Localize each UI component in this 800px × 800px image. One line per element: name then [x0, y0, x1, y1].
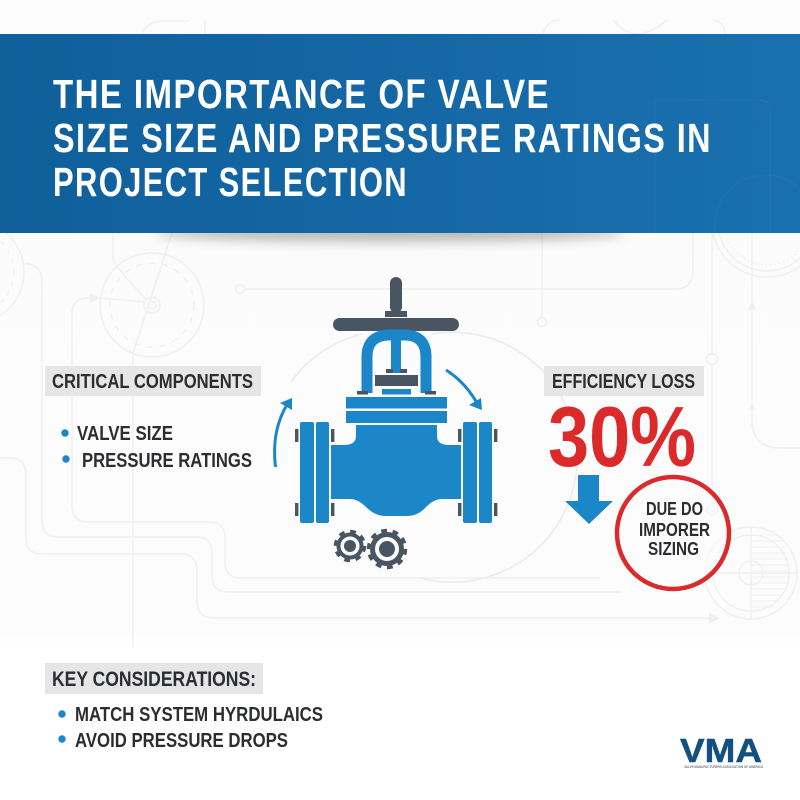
logo: VMA: VALVE MANUFACTURERS ASSOCIATION OF AMERICA [684, 765, 763, 769]
valve right flange [463, 422, 492, 523]
arrow: left rotation [275, 398, 292, 467]
heading: efficiency loss [544, 366, 704, 396]
panel: key considerations [45, 663, 323, 752]
bullet list: considerations: AVOID PRESSURE DROPS [75, 729, 288, 752]
heading: critical components [45, 366, 261, 396]
callout: due do imporer sizing: IMPORER [639, 520, 710, 540]
bullet list: components [61, 423, 252, 472]
logo: VMA: VMA [680, 732, 762, 769]
heading: key considerations [45, 663, 263, 694]
callout: due do imporer sizing: SIZING [648, 539, 699, 559]
valve left flange [300, 422, 329, 523]
background pipe schematic [0, 20, 800, 647]
stat: 30%: 30% [548, 390, 696, 485]
icon: gears [336, 530, 406, 568]
bullet list: considerations: MATCH SYSTEM HYRDULAICS [75, 703, 323, 726]
valve yoke [357, 332, 436, 394]
valve bolts [295, 429, 497, 516]
bullet list: components: PRESSURE RATINGS [82, 450, 252, 472]
header shadow [155, 222, 625, 242]
valve backdrop circle [291, 332, 577, 582]
bullet list: components: VALVE SIZE [77, 423, 173, 445]
arrow: right rotation [446, 370, 482, 410]
title: THE IMPORTANCE OF VALVE [53, 71, 550, 117]
heading: critical components: CRITICAL COMPONENTS [52, 371, 253, 393]
valve bonnet flanges [346, 397, 447, 423]
valve body [331, 425, 461, 516]
panel: efficiency loss [544, 366, 729, 589]
title [53, 71, 712, 205]
callout: due do imporer sizing: DUE DO [646, 499, 703, 519]
header band [0, 34, 800, 275]
panel: critical components [45, 366, 261, 472]
arrow: down [565, 475, 613, 524]
background schematic arrowheads [90, 293, 756, 624]
valve stem and handwheel [333, 277, 459, 331]
bullet list: considerations [58, 703, 323, 752]
title: PROJECT SELECTION [53, 159, 408, 205]
heading: efficiency loss: EFFICIENCY LOSS [552, 371, 695, 393]
heading: key considerations: KEY CONSIDERATIONS: [52, 668, 256, 691]
icon: valve [295, 277, 497, 523]
callout: due do imporer sizing [617, 477, 729, 589]
